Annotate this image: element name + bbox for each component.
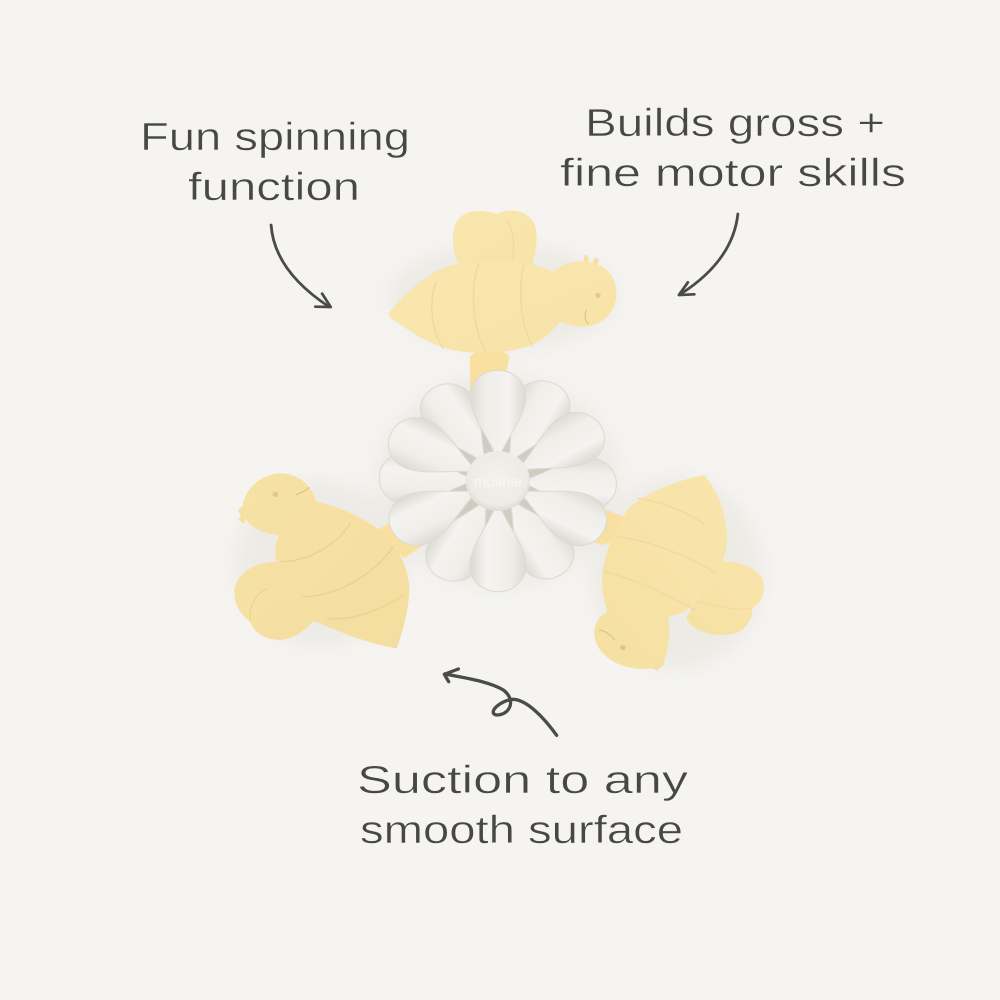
bee: left [234, 473, 409, 648]
stripes [281, 523, 404, 619]
face [620, 645, 626, 650]
bee: top [389, 210, 616, 353]
text: Suction to any smooth surface: Suction to any [357, 759, 689, 802]
body and head [389, 261, 616, 353]
text: Builds gross + fine motor skills [560, 102, 906, 195]
stripes [432, 263, 532, 353]
face [272, 492, 278, 497]
daisy flower [378, 370, 617, 592]
bee: right [594, 475, 764, 671]
face [595, 293, 601, 298]
text: Fun spinning function: function [188, 166, 360, 209]
brand mark: mushie [474, 475, 522, 490]
wings [686, 562, 764, 635]
wings [453, 210, 537, 265]
text: Builds gross + fine motor skills: Builds gross + [585, 102, 885, 145]
text: Fun spinning function: Fun spinning [140, 116, 410, 159]
antennae [584, 255, 599, 265]
stripes [603, 498, 716, 610]
petals [378, 370, 617, 592]
petal backing [434, 421, 562, 541]
arrow: curly suction arrow [444, 669, 557, 735]
text: Fun spinning function [140, 116, 410, 209]
text: Builds gross + fine motor skills: fine motor skills [560, 152, 906, 195]
text: Suction to any smooth surface [357, 759, 689, 852]
text: Suction to any smooth surface: smooth surface [360, 809, 683, 852]
arrow: to motor skills [679, 214, 738, 295]
wings [234, 562, 314, 640]
body and head [242, 473, 409, 648]
antennae [238, 507, 246, 524]
body and head [594, 475, 727, 669]
connector arms [377, 350, 627, 558]
toy: bees and daisy spinner [234, 210, 764, 671]
flower center [466, 451, 530, 511]
antennae [648, 658, 665, 671]
arrow: to spinning bee [271, 225, 331, 307]
